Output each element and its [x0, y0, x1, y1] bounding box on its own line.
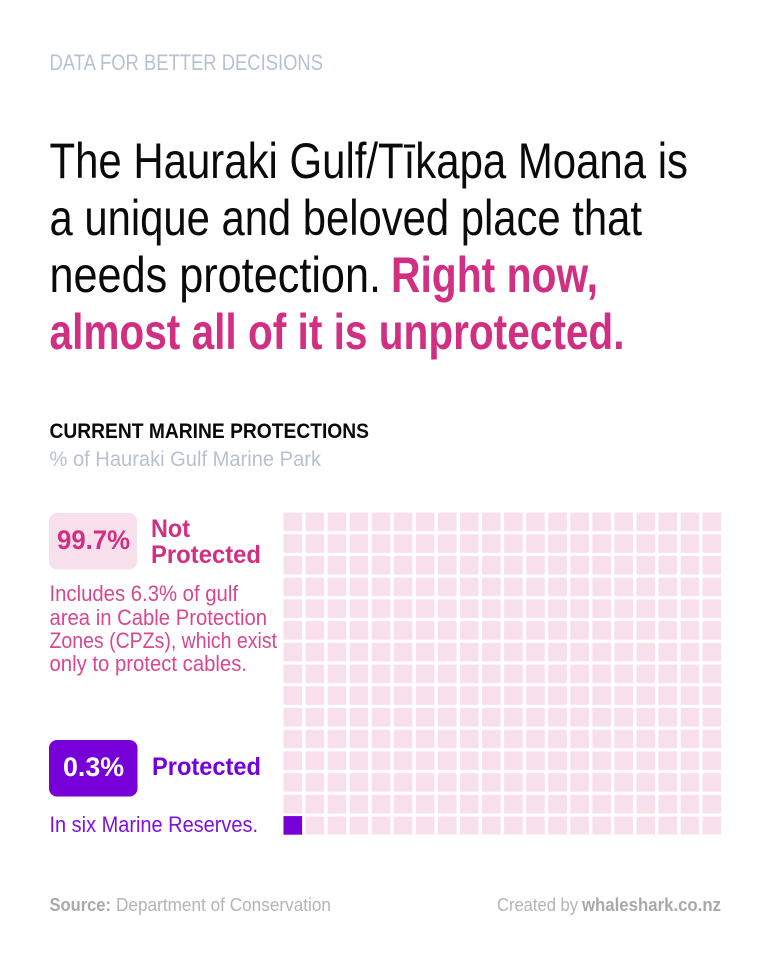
badge: 99.7% not protected: 99.7%	[57, 525, 130, 555]
badge: 0.3% protected	[49, 740, 138, 796]
note: cable protection zones: Zones (CPZs), which exist	[50, 628, 277, 653]
protected square	[284, 816, 302, 835]
note: cable protection zones	[50, 581, 277, 676]
note: cable protection zones: area in Cable Protection	[50, 605, 267, 630]
title	[50, 133, 688, 360]
creator credit: whaleshark.co.nz	[581, 894, 721, 915]
note: six marine reserves: In six Marine Reserves.	[50, 812, 258, 837]
badge: 0.3% protected: 0.3%	[63, 752, 124, 782]
note: cable protection zones: Includes 6.3% of gulf	[50, 581, 239, 606]
source credit: Department of Conservation	[116, 894, 331, 915]
title: Right now,	[391, 247, 598, 303]
label: not protected: Not	[151, 515, 191, 543]
creator credit	[497, 894, 721, 915]
creator credit: Created by	[497, 894, 579, 915]
title: a unique and beloved place that	[50, 190, 642, 246]
label: protected: Protected	[152, 753, 261, 781]
label: not protected: Protected	[151, 541, 261, 569]
section heading: CURRENT MARINE PROTECTIONS	[50, 419, 369, 443]
eyebrow heading: DATA FOR BETTER DECISIONS	[50, 50, 323, 75]
note: cable protection zones: only to protect cables.	[50, 651, 247, 676]
waffle chart: 300 squares	[284, 512, 721, 835]
source credit: Source:	[50, 894, 111, 915]
badge: 99.7% not protected	[49, 513, 137, 570]
title: needs protection.	[50, 247, 381, 303]
title: almost all of it is unprotected.	[50, 304, 624, 360]
section subheading: % of Hauraki Gulf Marine Park	[50, 447, 321, 471]
label: not protected	[151, 515, 261, 569]
